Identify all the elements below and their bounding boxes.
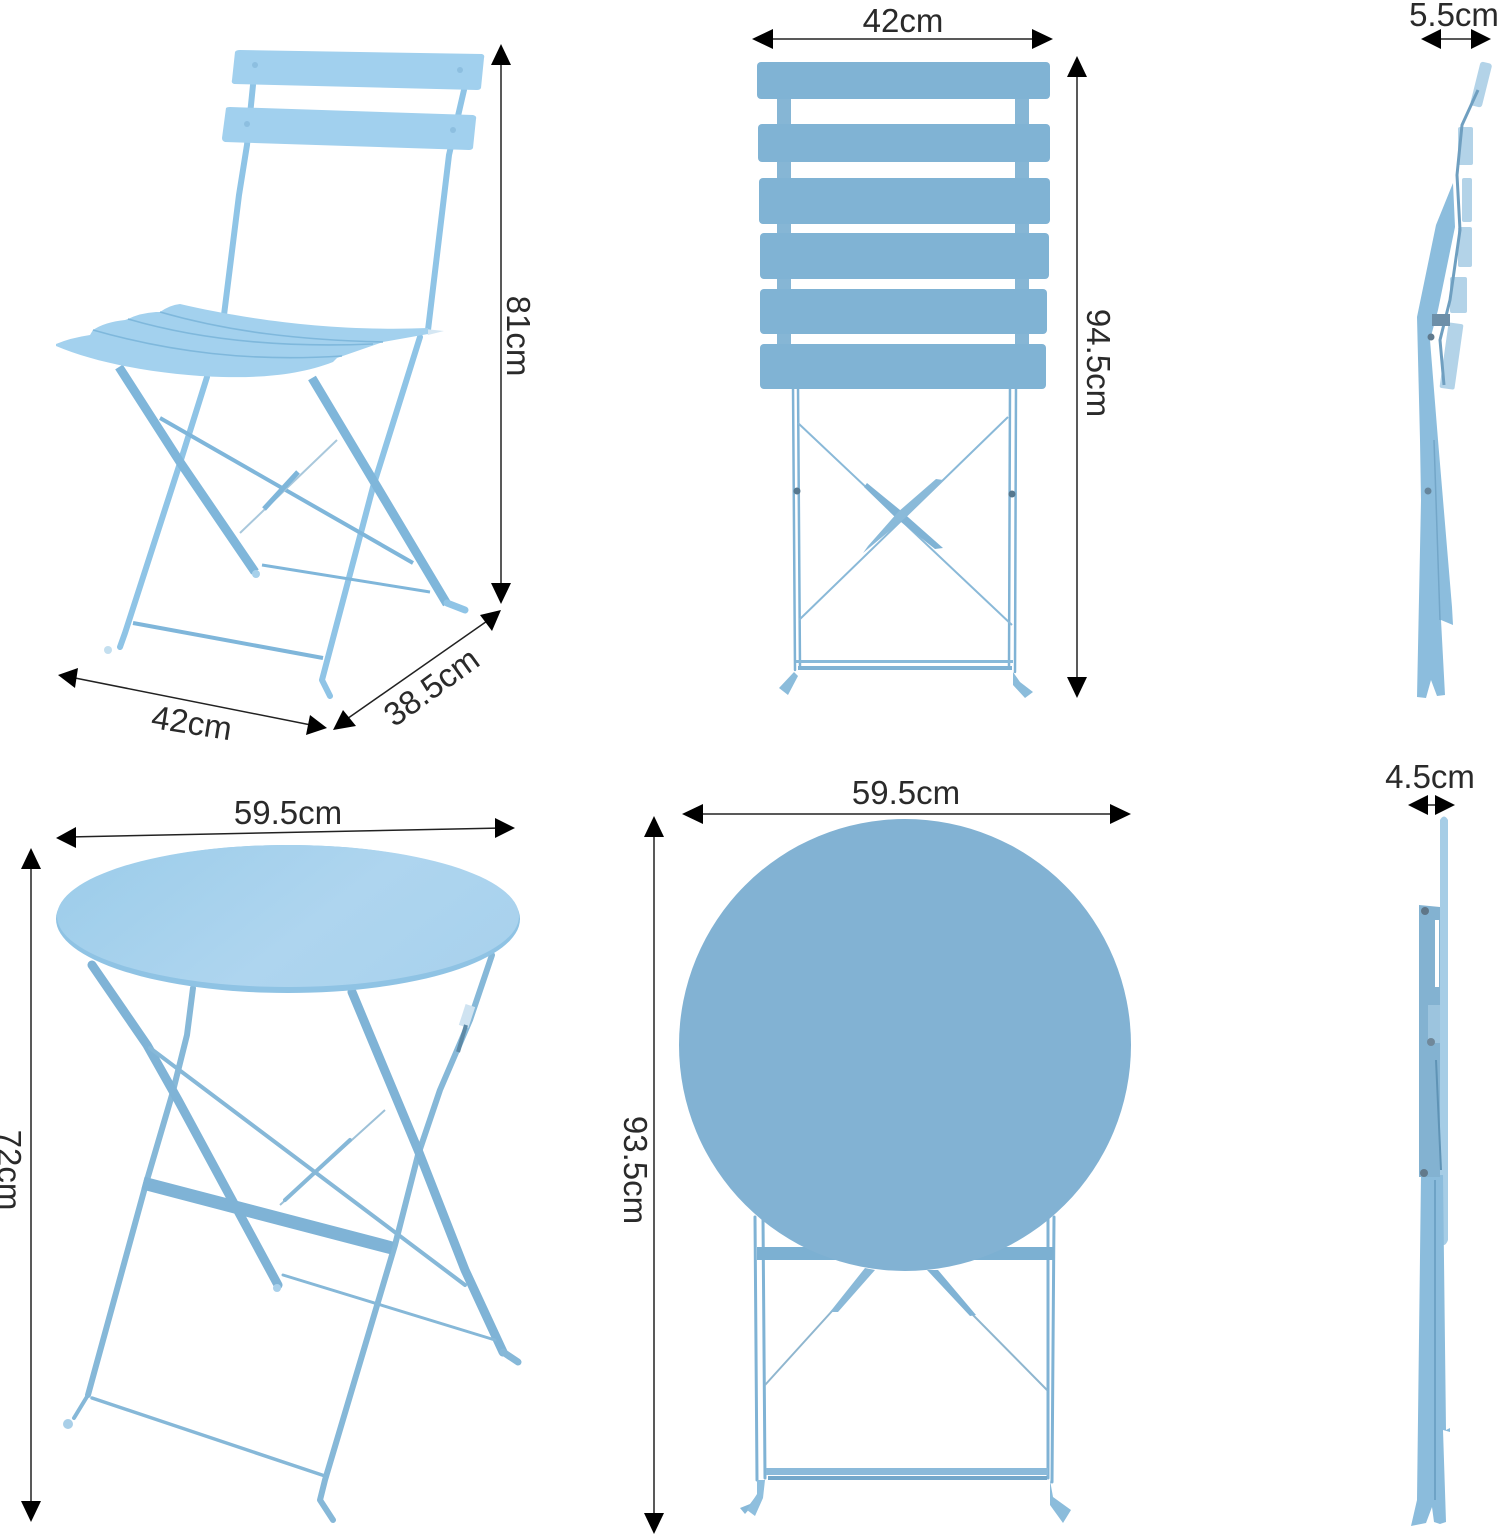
chair side view folded	[1417, 61, 1492, 698]
dimension: table folded height 93.5cm	[617, 816, 664, 1534]
dimension: table folded width 59.5cm: 59.5cm	[852, 774, 960, 811]
dimension: table folded width 59.5cm	[682, 774, 1131, 824]
dimension: table height 72cm	[0, 848, 41, 1522]
chair perspective view	[56, 50, 484, 696]
dimension: chair height 81cm: 81cm	[500, 296, 537, 376]
chair front view folded	[757, 62, 1050, 698]
dimension: table width 59.5cm: 59.5cm	[234, 794, 342, 831]
dimension: table thickness 4.5cm: 4.5cm	[1385, 758, 1475, 795]
dimension: table folded height 93.5cm: 93.5cm	[617, 1116, 654, 1224]
dimension: table thickness 4.5cm	[1385, 758, 1475, 815]
dimension: chair width 42cm: 42cm	[149, 698, 235, 747]
dimension: chair folded width 42cm	[752, 2, 1053, 49]
table side view folded	[1411, 816, 1450, 1526]
dimension: chair depth 38.5cm: 38.5cm	[377, 640, 486, 733]
table perspective view	[56, 845, 520, 1520]
table front view folded	[679, 819, 1131, 1523]
dimension: chair height 81cm	[491, 44, 537, 604]
dimension: chair folded height 94.5cm	[1067, 56, 1117, 698]
dimension: chair depth 38.5cm	[333, 610, 501, 733]
dimension: chair thickness 5.5cm	[1409, 0, 1499, 49]
dimension: table width 59.5cm	[56, 794, 515, 848]
dimension: chair width 42cm	[58, 668, 327, 747]
dimension: chair folded height 94.5cm: 94.5cm	[1080, 309, 1117, 417]
dimension: chair folded width 42cm: 42cm	[863, 2, 943, 39]
